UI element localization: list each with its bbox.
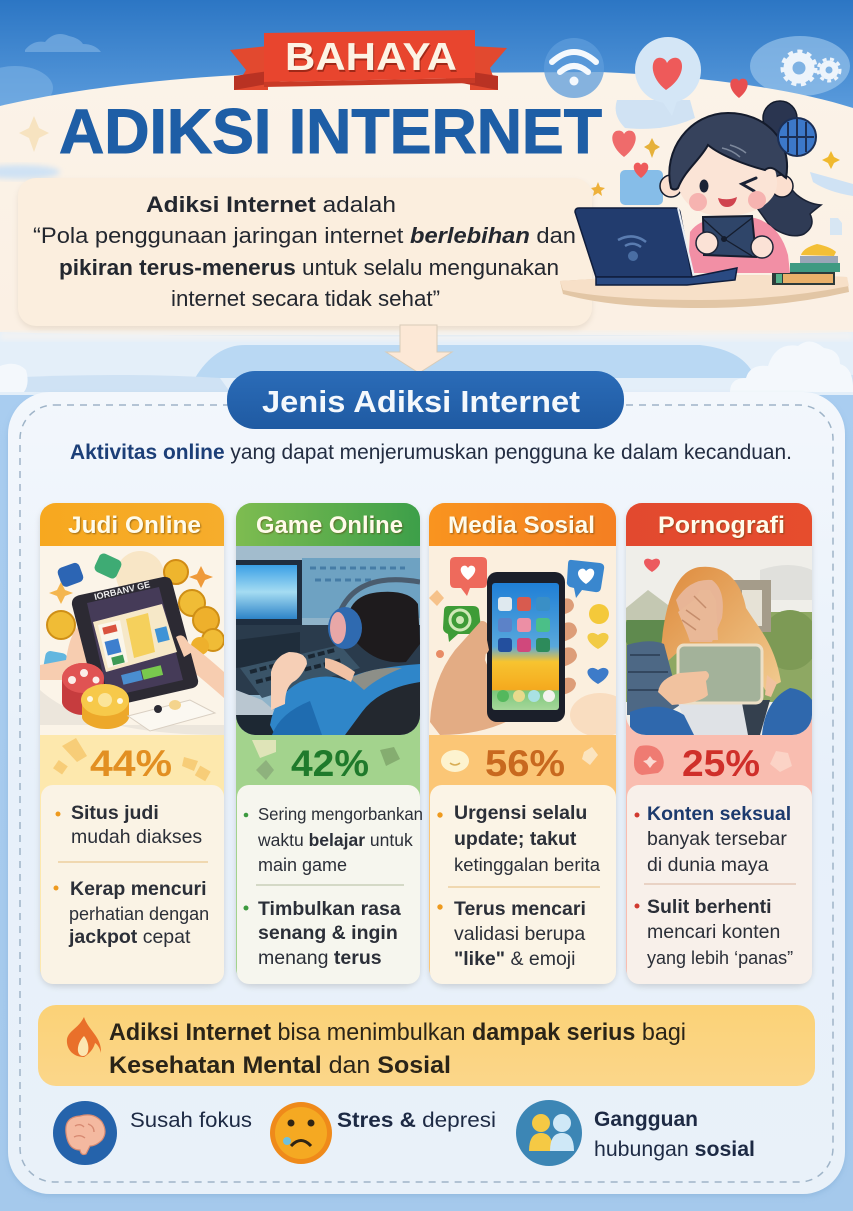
bullet text 1: ketinggalan berita <box>454 854 601 875</box>
percentage: 44% <box>90 743 172 784</box>
icon: gears <box>782 52 840 84</box>
hand on face <box>678 611 718 640</box>
text: line 2: Kesehatan Mental dan Sosial <box>109 1052 451 1079</box>
text: BAHAYA: BAHAYA <box>285 36 457 79</box>
bullet <box>437 812 443 818</box>
bullet text 2: Terus mencari <box>454 898 586 920</box>
header label: Pornografi <box>658 512 785 539</box>
stat band decoration <box>582 747 598 765</box>
bullet <box>437 904 443 910</box>
bullet text 1: Urgensi selalu <box>454 802 587 824</box>
percentage: 25% <box>682 743 760 784</box>
body <box>688 218 790 273</box>
icon: sad face <box>270 1102 332 1164</box>
panel: definition <box>18 178 592 329</box>
tablet <box>703 216 756 257</box>
hair bun <box>763 101 797 135</box>
text: line 1: Adiksi Internet bisa menimbulkan dampak serius bagi <box>109 1019 686 1046</box>
bullet text 2: Sulit berhenti <box>647 896 772 918</box>
bullet text 2: perhatian dengan <box>69 904 209 924</box>
background clouds <box>0 34 850 110</box>
bullet <box>244 906 248 910</box>
head and headphones <box>347 592 420 662</box>
text panel <box>627 785 812 984</box>
jacket <box>627 641 680 715</box>
arrow <box>386 325 452 373</box>
bullet <box>54 886 58 890</box>
stat band decoration <box>252 740 400 780</box>
stat band decoration <box>770 751 792 772</box>
text: Susah fokus <box>130 1109 252 1132</box>
tablet <box>678 645 762 703</box>
text: line 2: “Pola penggunaan jaringan internet berlebihan dan <box>33 223 576 248</box>
hands <box>271 652 307 710</box>
bullet <box>244 813 248 817</box>
banner: dampak serius <box>38 1005 815 1086</box>
text: Stres & depresi <box>337 1109 496 1132</box>
shirt <box>678 703 748 735</box>
fringe <box>669 113 787 190</box>
bullet text 2: yang lebih ‘panas” <box>647 948 793 968</box>
illustration: slot tablet and chips <box>40 546 224 735</box>
impact: Stres & depresi <box>270 1102 496 1164</box>
bullet <box>634 812 640 818</box>
smile bubble <box>441 750 469 772</box>
divider <box>644 883 796 885</box>
header <box>40 503 224 546</box>
main title: ADIKSI INTERNET <box>59 97 602 167</box>
bullet text 1: banyak tersebar <box>647 828 787 850</box>
laptop <box>575 208 692 277</box>
bullet text 2: Timbulkan rasa <box>258 898 401 920</box>
divider <box>58 861 208 863</box>
chips <box>62 663 129 729</box>
text: Jenis Adiksi Internet: Jenis Adiksi Internet <box>262 384 580 419</box>
illustration: hand holding phone <box>429 546 630 737</box>
illustration: girl with laptop <box>560 101 849 308</box>
card: Judi Online <box>40 503 224 987</box>
lower sky band with clouds <box>0 100 853 395</box>
impact: Gangguan hubungan sosial <box>516 1100 755 1166</box>
divider <box>256 884 404 886</box>
icon: people <box>516 1100 582 1166</box>
text: line 3: pikiran terus-menerus untuk selalu mengunakan <box>59 255 559 280</box>
bullet text 1: waktu belajar untuk <box>258 830 413 850</box>
bullet text 2: cepat <box>143 926 190 948</box>
bullet text 1: Sering mengorbankan <box>258 804 423 824</box>
bullet text 2: jackpot <box>68 926 138 948</box>
face <box>677 145 777 216</box>
hearts <box>644 559 660 572</box>
bullet text 1: Situs judi <box>71 802 159 824</box>
icon: small hearts and stars <box>591 79 842 235</box>
cards on table <box>128 700 215 731</box>
icon: brain <box>53 1101 117 1165</box>
icon: flame <box>67 1017 101 1057</box>
illustration: slot tablet and chips: IORBANV GE <box>93 579 151 602</box>
subtitle: Aktivitas online yang dapat menjerumuskan pengguna ke dalam kecanduan. <box>70 441 792 464</box>
bullet <box>56 812 60 816</box>
bullet text 2: senang & ingin <box>258 922 398 944</box>
text panel <box>237 785 423 984</box>
section heading pill <box>227 371 624 429</box>
text panel <box>430 785 616 984</box>
icon: blue folder <box>620 163 663 205</box>
header label: Media Sosial <box>448 512 595 539</box>
chair <box>345 682 420 735</box>
hair ornament <box>778 118 816 156</box>
bullet text 1: Konten seksual <box>647 803 791 825</box>
illustration: woman covering face <box>624 546 818 735</box>
percentage: 42% <box>291 743 369 784</box>
header <box>236 503 420 546</box>
percentage: 56% <box>485 743 565 784</box>
hair <box>660 567 781 690</box>
header <box>626 503 812 546</box>
bullet text 2: mencari konten <box>647 921 780 943</box>
card: Game Online <box>236 503 423 987</box>
ribbon banner <box>230 30 507 90</box>
bullet <box>634 904 640 908</box>
bullet text 1: update; takut <box>454 828 577 850</box>
hand on tablet <box>658 671 709 705</box>
illustration: boy gaming <box>236 546 420 735</box>
hoodie <box>270 664 420 735</box>
hair shine <box>722 145 746 157</box>
bullet text 2: validasi berupa <box>454 923 585 945</box>
bubble icon <box>634 745 664 775</box>
text: line 4: internet secara tidak sehat” <box>171 286 440 311</box>
phone <box>487 572 565 722</box>
bullet text 2: Kerap mencuri <box>70 878 207 900</box>
hands <box>40 627 87 680</box>
social bubbles <box>450 557 487 596</box>
panel: main container <box>8 392 845 1196</box>
card: Pornografi <box>624 503 818 987</box>
bullet text 1: main game <box>258 855 347 875</box>
jeans <box>630 707 694 735</box>
books <box>772 244 840 285</box>
icon: sparkle <box>19 116 49 152</box>
divider <box>448 886 600 888</box>
icon: wifi <box>544 38 604 98</box>
cream header backdrop <box>0 72 853 335</box>
text: line 2: hubungan sosial <box>594 1138 755 1161</box>
bullet text 1: mudah diakses <box>71 826 202 848</box>
impact: Susah fokus <box>53 1101 252 1165</box>
card: Media Sosial <box>429 503 630 987</box>
text: line 1: Gangguan <box>594 1108 698 1131</box>
bullet text 2: "like" & emoji <box>454 948 575 970</box>
ears <box>660 175 682 197</box>
text: line 1: Adiksi Internet adalah <box>146 192 396 217</box>
stat band decoration <box>53 738 211 781</box>
eyes and mouth <box>700 180 708 192</box>
tablet <box>72 577 198 708</box>
bullet text 1: di dunia maya <box>647 854 769 876</box>
header label: Judi Online <box>68 512 201 539</box>
header <box>429 503 616 546</box>
text panel <box>41 785 224 984</box>
table <box>560 275 849 308</box>
long hair <box>755 160 821 236</box>
header label: Game Online <box>256 512 403 539</box>
icon: speech bubble heart <box>635 37 701 116</box>
hand <box>430 621 510 735</box>
bullet text 2: menang terus <box>258 947 382 969</box>
face <box>676 580 723 642</box>
